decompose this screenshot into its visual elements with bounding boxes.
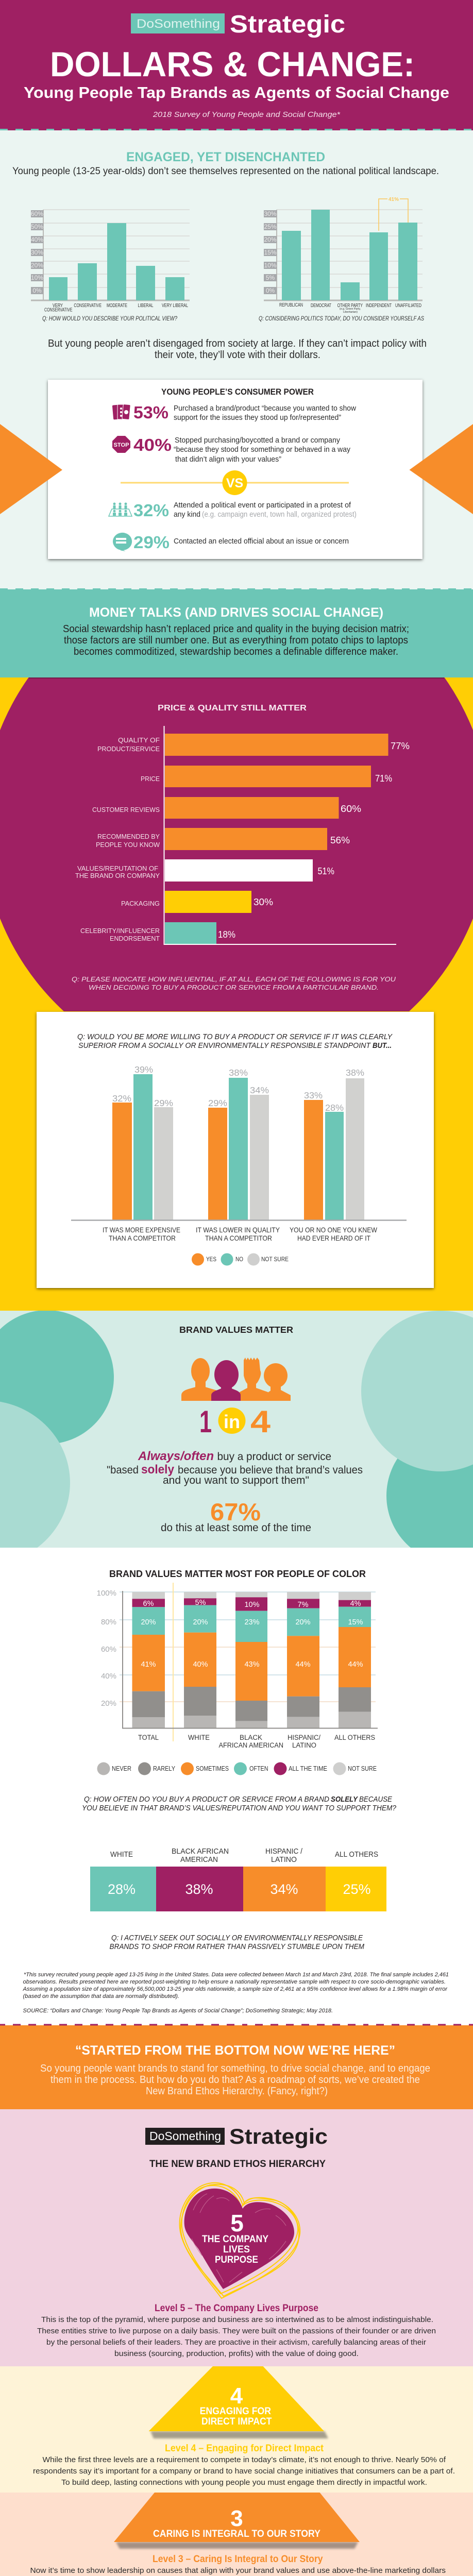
grouped bar chart: 39% [134,1064,153,1075]
level 4 body: To build deep, lasting connections with young people you must engage them directly in impactful work. [61,2478,427,2487]
legend: NO [235,1256,243,1263]
heading: BRAND VALUES MATTER [179,1325,293,1335]
row: 53% purchased: 53% [133,403,168,422]
body text [63,623,409,657]
panel: started from the bottom [0,2025,473,2109]
column: all others [339,1592,371,1728]
panel: money talks [0,588,473,677]
horizontal bar chart: PEOPLE YOU KNOW [96,841,160,849]
subtitle: Young People Tap Brands as Agents of Social Change [24,83,449,101]
row: 29% contacted: Contacted an elected official about an issue or concern [174,537,349,546]
footnote: (based on the assumption that data are normally distributed). [23,1993,179,1999]
horizontal bar chart [75,726,410,945]
level 5 body: business (sourcing, production, profits) with the value of doing good. [114,2349,359,2358]
horizontal bar chart: 51% [317,866,334,876]
logo: DoSomething Strategic: Strategic [230,11,345,38]
bar chart: political view: 10% [31,274,43,281]
footnote: *This survey recruited young people aged 13-25 living in the United States. Data were collected between March 1st and March 23rd, 2018. The final sample includes 2,461 [24,1972,449,1978]
grouped bar chart: 38% [229,1067,248,1078]
color strip chart: 25% [343,1882,371,1897]
horizontal bar chart: CUSTOMER REVIEWS [92,806,160,814]
color strip chart: 38% [185,1882,213,1897]
stacked bar chart: 40% [193,1660,208,1669]
bar chart: political view: 40% [31,236,43,243]
body text: them in the process. But how do you do that? As a roadmap of sorts, we’ve created the [50,2074,420,2086]
bar chart: party affiliation: UNAFFILIATED [395,303,421,309]
color strip chart: WHITE [110,1850,133,1859]
body text: New Brand Ethos Hierarchy. (Fancy, right?) [146,2086,328,2097]
bar chart: political view: 20% [31,262,43,269]
legend: RARELY [153,1765,176,1772]
horizontal bar chart: 30% [254,897,273,907]
stacked bar chart: 44% [295,1660,311,1669]
pyramid tier 3: 3 [230,2506,243,2531]
card heading: YOUNG PEOPLE’S CONSUMER POWER [161,387,314,397]
bar chart: political view [31,210,190,322]
question text: Q: HOW OFTEN DO YOU BUY A PRODUCT OR SERVICE FROM A BRAND [84,1795,329,1804]
bar chart: party affiliation: REPUBLICAN [279,302,303,308]
grouped bar chart [71,1064,407,1242]
stacked bar chart: 60% [101,1645,116,1654]
question text [82,1795,397,1812]
icon: four people [181,1358,291,1401]
horizontal bar chart: VALUES/REPUTATION OF [77,865,158,872]
stacked bar chart: 4% [350,1600,361,1608]
bar chart: party affiliation: OTHER PARTY [337,303,363,309]
orange triangle left [0,424,62,514]
legend: NOT SURE [261,1256,289,1263]
row: 40% stopped purchasing [112,435,351,464]
bar chart: political view: CONSERVATIVE [44,307,73,313]
grouped bar chart: 29% [154,1098,173,1108]
heart text: 5 [230,2210,244,2236]
horizontal bar chart: ENDORSEMENT [110,935,160,942]
stacked bar chart: AFRICAN AMERICAN [218,1741,283,1749]
stacked bar chart [97,1583,378,1749]
heading: THE NEW BRAND ETHOS HIERARCHY [149,2159,326,2170]
orange triangle right [409,424,473,514]
heart text: LIVES [223,2244,250,2255]
stacked bar chart: 5% [195,1599,206,1607]
pyramid tier 3: CARING IS INTEGRAL TO OUR STORY [153,2529,320,2539]
statement text [48,337,427,361]
bar chart: political view: Q: HOW WOULD YOU DESCRIBE YOUR POLITICAL VIEW? [42,315,177,322]
bar chart: political view: MODERATE [107,303,127,309]
level 5 body: by the personal beliefs of their leaders. They are proactive in their activism, carefully balancing areas of their [46,2338,426,2347]
stacked bar chart: BLACK [240,1734,262,1741]
stacked bar chart: 20% [101,1699,116,1708]
row: 29% contacted: 29% [133,533,170,552]
decorative circles [0,1310,473,1565]
column: white [184,1592,216,1728]
row: 32% attended: (e.g. campaign event, town hall, organized protest) [202,511,357,519]
stacked bar chart: 40% [101,1672,116,1681]
bar chart: political view: 50% [31,223,43,230]
grouped bar chart: THAN A COMPETITOR [205,1234,272,1242]
footnote [22,1972,449,2014]
logo: DoSomething Strategic dark: Strategic [229,2124,328,2148]
1 in 4: in [224,1411,240,1432]
stacked bar chart: 20% [141,1618,156,1626]
level 5 body: This is the top of the pyramid, where purpose and business are so intertwined as to be almost indistinguishable. [41,2315,433,2324]
horizontal bar chart: RECOMMENDED BY [97,833,160,840]
stacked bar chart: HISPANIC/ [288,1734,320,1741]
panel: brand values matter [0,1310,473,1565]
column: black african american [235,1592,267,1728]
legend [97,1762,377,1775]
stacked bar chart: 7% [298,1601,309,1609]
bar chart: political view: 60% [31,210,43,217]
stacked bar chart: LATINO [292,1741,316,1749]
question text: YOU BELIEVE IN THAT BRAND’S VALUES/REPUTATION AND YOU WANT TO SUPPORT THEM? [82,1804,397,1812]
icon: scribbled heart [180,2183,300,2298]
row: 40% stopped purchasing: Stopped purchasing/boycotted a brand or company [175,436,341,445]
bracket callout [379,196,408,231]
horizontal bar chart: QUALITY OF [118,737,160,744]
level 3 title: Level 3 – Caring Is Integral to Our Story [153,2553,323,2565]
legend: SOMETIMES [196,1765,229,1772]
question text [77,1033,393,1050]
pyramid tier 3 [114,2493,360,2549]
icon: stop sign [112,436,130,453]
card: young people's consumer power [48,380,423,559]
always often text: Always/often [138,1449,214,1463]
bar chart: party affiliation: 25% [264,223,277,230]
statement text: But young people aren’t disengaged from society at large. If they can’t impact policy with [48,337,427,349]
heart text: THE COMPANY [202,2234,268,2245]
horizontal bar chart: THE BRAND OR COMPANY [75,872,160,879]
level 5 body [37,2315,436,2358]
bar chart: party affiliation: 10% [264,262,277,269]
row: 32% attended: 32% [133,501,169,520]
panel: level 5 [0,2109,473,2366]
survey tagline: 2018 Survey of Young People and Social Change* [153,110,341,119]
row: 29% contacted [113,533,349,552]
bar chart: party affiliation: Q: CONSIDERING POLITICS TODAY, DO YOU CONSIDER YOURSELF AS [259,315,424,322]
legend: YES [206,1256,216,1263]
1 in 4 [199,1404,271,1439]
level 4 title: Level 4 – Engaging for Direct Impact [165,2443,324,2454]
bar chart: party affiliation: 5% [266,274,275,281]
bar chart: political view: 30% [31,249,43,256]
stacked bar chart: 20% [193,1618,208,1626]
chart heading: PRICE & QUALITY STILL MATTER [158,704,307,713]
row: 53% purchased [112,403,356,422]
level 4 body: respondents say it’s important for a company or brand to have social change initiatives that consumers can be a part of. [33,2467,455,2476]
body text: So young people want brands to stand for something, to drive social change, and to engage [40,2063,430,2074]
horizontal bar chart: 77% [391,741,410,751]
logo: DoSomething Strategic dark: DoSomething [149,2129,221,2143]
grouped bar chart: 28% [325,1103,344,1113]
question text: BECAUSE [359,1795,392,1804]
panel: level 4 [0,2366,473,2493]
stacked bar chart: 80% [101,1618,116,1626]
body text: becomes commoditized, stewardship becomes a definable difference maker. [74,646,398,657]
heading: “STARTED FROM THE BOTTOM NOW WE’RE HERE” [75,2043,395,2058]
pyramid tier 4: DIRECT IMPACT [201,2416,272,2427]
logo: DoSomething Strategic [131,11,345,38]
grouped bar chart: 32% [112,1093,131,1104]
horizontal bar chart: 18% [218,929,235,940]
horizontal bar chart: CELEBRITY/INFLUENCER [80,927,160,935]
pyramid tier 4 [149,2366,328,2438]
bar chart: political view: CONSERVATIVE [74,303,102,309]
bar chart: party affiliation: Libertarian) [343,311,358,314]
question text: SUPERIOR FROM A SOCIALLY OR ENVIRONMENTALLY RESPONSIBLE STANDPOINT [78,1042,371,1050]
panel: level 3 [0,2493,473,2576]
bar chart: party affiliation: INDEPENDENT [366,303,392,309]
color strip chart: ALL OTHERS [335,1850,378,1859]
stacked bar chart: 43% [244,1660,260,1669]
column: hispanic latino [287,1592,319,1728]
row: 53% purchased: support for the issues they stood up for/represented” [174,414,341,422]
legend: OFTEN [249,1765,268,1772]
legend: ALL THE TIME [289,1765,327,1772]
bracket callout: 41% [388,197,399,202]
bar chart: party affiliation [259,196,424,322]
bar chart: party affiliation: 20% [264,236,277,243]
bar chart: political view: VERY LIBERAL [162,303,188,309]
level 3 body: Now it’s time to show leadership on causes that align with your brand values and use above-the-line marketing dollars [30,2566,446,2575]
horizontal bar chart: 60% [341,804,361,814]
bar chart: political view: 0% [32,287,42,294]
grouped bar chart: THAN A COMPETITOR [109,1234,176,1242]
67% stat: do this at least some of the time [161,1522,311,1534]
logo: DoSomething Strategic dark [145,2124,328,2148]
stacked bar chart: 10% [244,1601,260,1609]
horizontal bar chart: 56% [330,835,350,845]
panel: price and quality still matter [0,677,473,1011]
grouped bar chart: 34% [250,1085,269,1095]
color strip chart: HISPANIC / [265,1847,303,1856]
level 4 body [33,2455,455,2487]
question text: Q: PLEASE INDICATE HOW INFLUENTIAL, IF AT ALL, EACH OF THE FOLLOWING IS FOR YOU [72,975,396,983]
question text: BUT... [373,1042,392,1050]
card: would you be more willing to buy [37,1012,434,1288]
always often text: solely [141,1463,175,1477]
stacked bar chart: 6% [143,1600,154,1608]
stacked bar chart: 23% [244,1618,260,1626]
body text: those factors are still number one. But as everything from potato chips to laptops [64,635,408,646]
row: 53% purchased: Purchased a brand/product “because you wanted to show [174,404,356,413]
always often text: because you believe that brand’s values [178,1464,363,1476]
stacked bar chart: TOTAL [138,1734,159,1741]
person one [181,1358,219,1401]
icon: speech bubble [113,533,132,551]
grouped bar chart: 33% [304,1090,323,1100]
person two, highlighted [211,1360,241,1401]
legend: NEVER [112,1765,131,1772]
grouped bar chart: HAD EVER HEARD OF IT [297,1234,370,1242]
row: 32% attended [109,501,357,520]
intro text: Young people (13-25 year-olds) don’t see themselves represented on the national political landscape. [12,166,439,177]
color strip chart: 34% [270,1882,298,1897]
footnote: SOURCE: “Dollars and Change: Young People Tap Brands as Agents of Social Change”; DoSomething Strategic; May 2018. [23,2008,333,2014]
always often text [107,1449,363,1486]
row: 40% stopped purchasing: that didn’t align with your values” [175,455,281,464]
bar chart: party affiliation: 30% [264,210,277,217]
pyramid tier 4: 4 [230,2383,243,2409]
body text [40,2063,430,2097]
heading: ENGAGED, YET DISENCHANTED [126,150,325,164]
horizontal bar chart: 71% [375,773,392,784]
row: 32% attended: Attended a political event or participated in a protest of [174,501,351,510]
color strip chart: AMERICAN [180,1855,218,1864]
legend: NOT SURE [348,1765,377,1772]
panel: brand values matter most for people of color [0,1548,473,2025]
bar chart: party affiliation: (e.g. Green Party, [340,308,361,311]
horizontal bar chart: PRICE [141,775,160,783]
heart text: PURPOSE [215,2255,258,2265]
67% stat: 67% [210,1498,261,1526]
grouped bar chart: IT WAS LOWER IN QUALITY [196,1226,280,1234]
person three, spiky hair [240,1358,268,1401]
horizontal bar chart: PACKAGING [121,900,160,907]
column: total [132,1592,165,1728]
level 5 title: Level 5 – The Company Lives Purpose [155,2302,318,2314]
panel: header [0,0,473,130]
panel: yellow background [0,677,473,1311]
stacked bar chart: 20% [295,1618,311,1626]
logo: DoSomething Strategic: DoSomething [137,17,220,31]
bar chart: party affiliation: 0% [266,287,275,294]
footnote: observations. Results presented here are reported post-weighting to help ensure a nationally representative sample with respect to core socio-demographic variables. [23,1979,446,1985]
grouped bar chart: 38% [346,1067,364,1078]
question text [72,975,396,991]
color strip chart [90,1847,386,1911]
statement text: their vote, they’ll vote with their dollars. [155,349,320,361]
question text: Q: I ACTIVELY SEEK OUT SOCIALLY OR ENVIRONMENTALLY RESPONSIBLE [111,1934,363,1942]
level 5 body: These entities strive to live purpose on a daily basis. They were built on the passions of their founder or are driven [37,2327,436,2335]
bar chart: political view: LIBERAL [138,303,154,309]
67% stat [161,1498,311,1534]
stacked bar chart: 15% [348,1618,363,1626]
vs divider: VS [226,476,243,490]
stacked bar chart: WHITE [188,1734,210,1741]
1 in 4: 1 [199,1404,212,1439]
color strip chart: BLACK AFRICAN [172,1847,229,1856]
grouped bar chart: 29% [208,1098,227,1108]
stacked bar chart: 44% [348,1660,363,1669]
pyramid tier 4: ENGAGING FOR [200,2406,271,2417]
panel: engaged yet disenchanted [0,130,473,588]
icon: meeting people [109,503,132,516]
body text: Social stewardship hasn’t replaced price and quality in the buying decision matrix; [63,623,409,635]
row: 32% attended: any kind [174,511,200,519]
stacked bar chart: 100% [97,1589,116,1598]
row: 40% stopped purchasing: 40% [133,435,172,454]
question text: BRANDS TO SHOP FROM RATHER THAN PASSIVELY STUMBLE UPON THEM [109,1943,365,1951]
heading: MONEY TALKS (AND DRIVES SOCIAL CHANGE) [89,605,383,620]
heart text [202,2210,268,2265]
color strip chart: 28% [108,1882,136,1897]
row: 40% stopped purchasing: “because they stood for something or behaved in a way [174,446,351,454]
question text: SOLELY [331,1795,358,1804]
color strip chart: LATINO [271,1855,297,1864]
question text: Q: WOULD YOU BE MORE WILLING TO BUY A PRODUCT OR SERVICE IF IT WAS CLEARLY [77,1033,393,1041]
question text: WHEN DECIDING TO BUY A PRODUCT OR SERVICE FROM A PARTICULAR BRAND. [89,984,379,991]
grouped bar chart: YOU OR NO ONE YOU KNEW [290,1226,378,1234]
vs divider [121,470,349,495]
always often text: buy a product or service [217,1451,331,1463]
icon: cards [112,404,130,420]
bar chart: party affiliation: DEMOCRAT [311,303,331,309]
person four [264,1363,291,1401]
always often text: and you want to support them" [163,1475,309,1486]
footnote: Assuming a population size of approximately 56,500,000 13-25 year olds nationwide, a sample size of 2,461 at a 95% confidence level allows for a 1.98% margin of error [22,1986,448,1992]
title: DOLLARS & CHANGE: [50,45,415,84]
bar chart: party affiliation: 15% [264,249,277,256]
always often text: "based [107,1464,139,1476]
stacked bar chart: 41% [141,1660,156,1669]
bar chart: political view: VERY [53,303,63,309]
icon: stop sign: STOP [113,442,129,448]
horizontal bar chart: PRODUCT/SERVICE [97,745,160,753]
legend [192,1253,289,1265]
grouped bar chart: IT WAS MORE EXPENSIVE [103,1226,180,1234]
stacked bar chart: ALL OTHERS [334,1734,375,1741]
heading: BRAND VALUES MATTER MOST FOR PEOPLE OF COLOR [109,1569,366,1579]
1 in 4: 4 [250,1404,271,1439]
question text [109,1934,365,1951]
level 4 body: While the first three levels are a requirement to compete in today’s climate, it’s not enough to thrive. Nearly 50% of [42,2455,446,2464]
